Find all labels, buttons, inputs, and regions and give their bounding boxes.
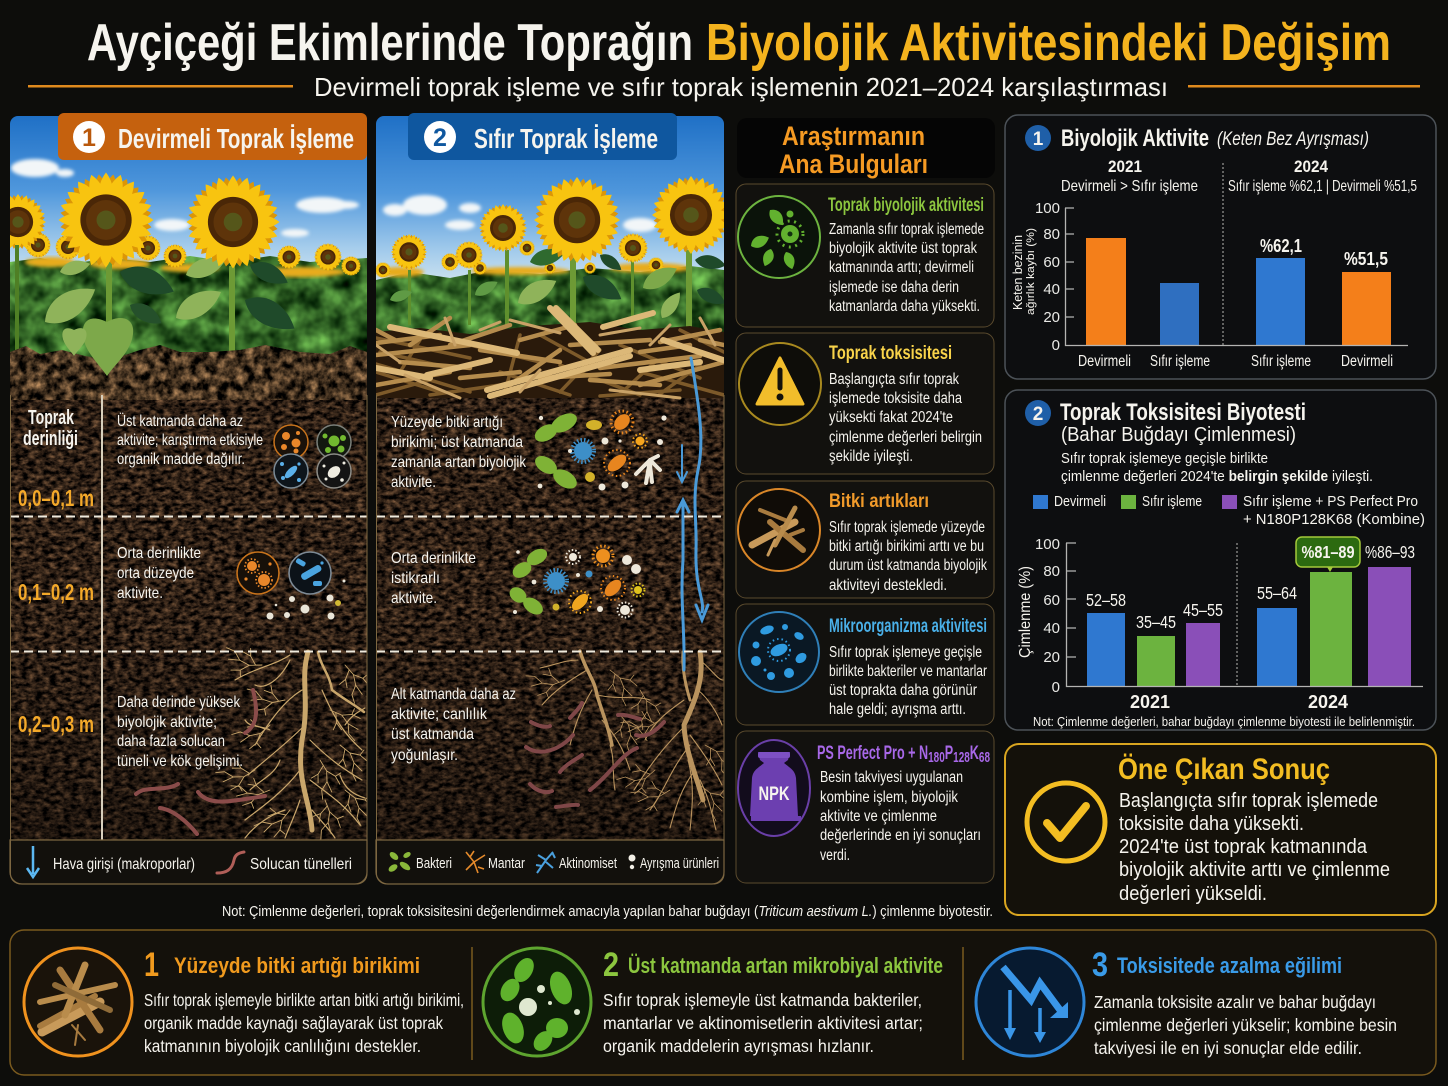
- bar chart: %62,1: [1260, 236, 1302, 256]
- card: PS Perfect Pro: 180: [928, 749, 945, 766]
- card: PS Perfect Pro: kombine işlem, biyolojik: [820, 789, 958, 806]
- card: soil toxicity: işlemede toksisite daha: [829, 390, 962, 407]
- legend: organisms: Aktinomiset: [559, 855, 618, 872]
- card: PS Perfect Pro: değerlerinde en iyi sonuçları: [820, 827, 981, 844]
- crop residue layer: [376, 308, 724, 398]
- card: microorganism activity: hale geldi; ayrışma arttı.: [829, 701, 966, 718]
- panel: key result: biyolojik aktivite arttı ve çimlenme: [1119, 859, 1390, 881]
- year captions: [1061, 157, 1417, 195]
- bar chart: Devirmeli: [1078, 353, 1131, 370]
- card: crop residues: durum üst katmanda biyolojik: [829, 557, 987, 574]
- title: [87, 14, 1391, 72]
- text: surface layer: birikimi; üst katmanda: [391, 434, 523, 451]
- panel: key result: 2024'te üst toprak katmanında: [1119, 836, 1368, 858]
- panel: key result: [1005, 744, 1436, 915]
- card: soil toxicity: [736, 333, 994, 474]
- text: deep layer: daha fazla solucan: [117, 733, 225, 750]
- icon: NPK bag: [738, 740, 810, 836]
- note: toxicity bioassay: Not: Çimlenme değerleri, toprak toksisitesini değerlendirmek amacıyla yapılan bahar buğdayı (Triticum aestivum L.) çimlenme biyotestir.: [222, 904, 993, 920]
- legend: conventional tillage: Solucan tünelleri: [250, 856, 352, 873]
- text: middle layer: istikrarlı: [391, 570, 440, 587]
- callout: best value: %81–89: [1302, 542, 1355, 562]
- card: soil biological activity: biyolojik aktivite üst toprak: [829, 240, 977, 257]
- icon: microbe and leaves: [738, 196, 820, 278]
- panel: key result: Başlangıçta sıfır toprak işlemede: [1119, 790, 1378, 812]
- bar chart: 0: [1052, 337, 1060, 354]
- bar chart: Devirmeli: [1341, 353, 1393, 370]
- card: PS Perfect Pro: 128: [953, 749, 970, 766]
- header: no-till: Sıfır Toprak İşleme: [474, 123, 658, 154]
- field scene: sunflowers: [0, 116, 367, 365]
- text: middle layer: Orta derinlikte: [391, 550, 476, 567]
- microbes: middle layer: [507, 545, 644, 618]
- chart summary: [1061, 451, 1373, 485]
- bar chart: 0: [1052, 679, 1060, 696]
- takeaway 1: Sıfır toprak işlemeyle birlikte artan bitki artığı birikimi,: [144, 990, 464, 1010]
- bar chart: Sıfır işleme: [1150, 353, 1210, 370]
- roots: [520, 651, 738, 830]
- text: deep layer: Alt katmanda daha az: [391, 686, 516, 703]
- legend: Sıfır işleme + PS Perfect Pro: [1243, 493, 1418, 510]
- panel: key result: Öne Çıkan Sonuç: [1118, 753, 1330, 786]
- bar chart: ağırlık kaybı (%): [1025, 228, 1037, 315]
- year captions: 2024: [1294, 157, 1328, 176]
- text: surface layer: [391, 414, 527, 491]
- icon: worm tunnel: [217, 852, 244, 873]
- chart summary: çimlenme değerleri 2024'te belirgin şekilde iyileşti.: [1061, 469, 1373, 485]
- depth labels: derinliği: [23, 428, 78, 450]
- icons: top layer microbes: [274, 425, 351, 488]
- legend: conventional tillage: Hava girişi (makroporlar): [53, 856, 195, 873]
- text: middle layer: aktivite.: [117, 585, 163, 602]
- card: soil biological activity: Toprak biyolojik aktivitesi: [828, 195, 984, 216]
- chart summary: Sıfır toprak işlemeye geçişle birlikte: [1061, 451, 1268, 467]
- icon: decomposition products: [628, 854, 636, 869]
- panel: biological activity chart: [1005, 115, 1436, 379]
- card: soil toxicity: Toprak toksisitesi: [829, 343, 952, 364]
- text: middle layer: [117, 545, 201, 602]
- icon: decreasing trend: [976, 948, 1084, 1056]
- bar chart: [1010, 163, 1408, 370]
- takeaway 2: Sıfır toprak işlemeyle üst katmanda bakteriler,: [603, 990, 922, 1010]
- icon: green bacteria: [483, 948, 591, 1056]
- takeaway 1: [24, 946, 464, 1056]
- takeaway 1: Yüzeyde bitki artığı birikimi: [174, 953, 420, 978]
- title: Ayçiçeği Ekimlerinde Toprağın: [87, 14, 693, 72]
- card: PS Perfect Pro: Besin takviyesi uygulanan: [820, 769, 963, 786]
- text: deep layer: Daha derinde yüksek: [117, 694, 241, 711]
- bar chart: Keten bezinin: [1010, 235, 1025, 310]
- legend: organisms: [376, 840, 724, 884]
- subtitle: Devirmeli toprak işleme ve sıfır toprak işlemenin 2021–2024 karşılaştırması: [314, 72, 1168, 102]
- panel: soil toxicity chart: [1005, 390, 1436, 730]
- bar chart: 2024: [1308, 692, 1348, 712]
- icon: warning triangle: [739, 343, 821, 425]
- card: microorganism activity: üst toprakta daha görünür: [829, 682, 977, 699]
- air arrows: [677, 358, 708, 670]
- bar chart: 2021: [1130, 692, 1170, 712]
- card: PS Perfect Pro: PS Perfect Pro + N: [817, 743, 984, 764]
- text: deep layer: tüneli ve kök gelişimi.: [117, 753, 243, 770]
- depth labels: 0,0–0,1 m: [18, 485, 94, 511]
- legend: Sıfır işleme: [1142, 493, 1202, 510]
- icon: crop residue: [24, 948, 132, 1056]
- chart heading: (Keten Bez Ayrışması): [1217, 129, 1369, 150]
- text: top layer: [117, 412, 263, 468]
- icon: bacteria: [387, 850, 412, 873]
- text: deep layer: yoğunlaşır.: [391, 747, 458, 764]
- header: conventional tillage: Devirmeli Toprak İşleme: [118, 123, 354, 154]
- text: middle layer: aktivite.: [391, 590, 437, 607]
- legend: conventional tillage: [10, 840, 367, 884]
- chart heading: 1: [1033, 129, 1044, 150]
- card: microorganism activity: Mikroorganizma aktivitesi: [829, 616, 987, 637]
- icon: actinomycete: [536, 852, 555, 873]
- year captions: Devirmeli > Sıfır işleme: [1061, 178, 1198, 195]
- card: soil biological activity: Zamanla sıfır toprak işlemede: [829, 221, 984, 238]
- text: deep layer: üst katmanda: [391, 726, 474, 743]
- takeaway 2: 2: [603, 946, 619, 984]
- card: PS Perfect Pro: aktivite ve çimlenme: [820, 808, 937, 825]
- heading: main findings: Araştırmanın: [782, 121, 925, 151]
- panel: no-till: [371, 113, 744, 884]
- takeaway 2: mantarlar ve aktinomisetlerin aktivitesi artar;: [603, 1013, 923, 1033]
- takeaway 3: 3: [1092, 946, 1108, 984]
- chart heading: 2: [1033, 404, 1043, 425]
- card: PS Perfect Pro: [736, 731, 994, 883]
- depth labels: Toprak: [28, 407, 75, 429]
- bar chart: 55–64: [1257, 583, 1297, 603]
- takeaway 1: katmanının biyolojik canlılığını destekler.: [144, 1036, 421, 1056]
- bar chart: [1017, 536, 1423, 712]
- text: surface layer: Yüzeyde bitki artığı: [391, 414, 503, 431]
- card: crop residues: Sıfır toprak işlemede yüzeyde: [829, 519, 985, 536]
- bar chart: 80: [1043, 563, 1060, 580]
- card: microorganism activity: [736, 604, 994, 725]
- depth labels: 0,1–0,2 m: [18, 579, 94, 605]
- depth guides: [376, 516, 724, 652]
- bar chart: 100: [1035, 200, 1060, 217]
- card: soil biological activity: katmanında arttı; devirmeli: [829, 259, 974, 276]
- legend: Devirmeli: [1054, 493, 1106, 510]
- icon: blue microbes: [739, 612, 819, 692]
- panel border: conventional: [10, 395, 367, 884]
- takeaway 2: [483, 946, 943, 1056]
- bar chart: 52–58: [1086, 590, 1126, 610]
- microbes: surface layer: [532, 409, 667, 493]
- depth labels: [18, 407, 94, 737]
- takeaway 3: takviyesi ile en iyi sonuçlar elde edilir.: [1094, 1038, 1362, 1058]
- card: crop residues: aktiviteyi destekledi.: [829, 577, 947, 594]
- earthworms: [526, 703, 664, 807]
- bar chart: 60: [1043, 592, 1060, 609]
- panel: conventional tillage: [0, 113, 372, 884]
- text: middle layer: Orta derinlikte: [117, 545, 201, 562]
- card: microorganism activity: Sıfır toprak işlemeye geçişle: [829, 644, 982, 661]
- roots: [215, 647, 366, 840]
- takeaway 3: [976, 946, 1397, 1058]
- callout: best value: [1296, 537, 1360, 572]
- card: PS Perfect Pro: P: [945, 743, 953, 764]
- panel: takeaways: [10, 930, 1436, 1075]
- chart heading: [1025, 399, 1306, 446]
- takeaway 2: Üst katmanda artan mikrobiyal aktivite: [628, 953, 943, 978]
- depth guides: [10, 395, 367, 840]
- field scene: sunflowers: [376, 116, 724, 334]
- bar chart: Sıfır işleme: [1251, 353, 1311, 370]
- bar chart: 20: [1043, 309, 1060, 326]
- text: deep layer: biyolojik aktivite;: [117, 714, 217, 731]
- bar chart: %51,5: [1344, 249, 1388, 269]
- card: PS Perfect Pro: K: [970, 743, 979, 764]
- legend: organisms: Ayrışma ürünleri: [640, 855, 719, 872]
- bar chart: 80: [1043, 226, 1060, 243]
- bar chart: Çimlenme (%): [1017, 566, 1034, 658]
- takeaway 2: organik maddelerin ayrışması hızlanır.: [603, 1036, 874, 1056]
- soil layers: [376, 385, 724, 845]
- card: microorganism activity: birlikte bakteriler ve mantarlar: [829, 663, 987, 680]
- bar chart: 100: [1035, 536, 1060, 553]
- soil layers: [10, 318, 367, 845]
- text: surface layer: aktivite.: [391, 474, 436, 491]
- legend: + N180P128K68 (Kombine): [1243, 511, 1425, 528]
- text: deep layer: aktivite; canlılık: [391, 706, 488, 723]
- card: crop residues: Bitki artıkları: [829, 491, 929, 512]
- card: soil toxicity: Başlangıçta sıfır toprak: [829, 371, 959, 388]
- takeaway 1: 1: [144, 946, 159, 984]
- depth labels: 0,2–0,3 m: [18, 711, 94, 737]
- card: soil toxicity: yüksekti fakat 2024'te: [829, 409, 953, 426]
- panel border: no-till: [376, 395, 724, 884]
- chart heading: (Bahar Buğdayı Çimlenmesi): [1061, 424, 1296, 446]
- header: no-till: [408, 113, 677, 160]
- card: soil toxicity: şekilde iyileşti.: [829, 448, 913, 465]
- chart heading: Biyolojik Aktivite: [1061, 125, 1209, 152]
- panel: key result: değerleri yükseldi.: [1119, 883, 1267, 905]
- header: conventional tillage: [58, 113, 367, 160]
- card: soil biological activity: [736, 184, 994, 327]
- icon: check mark: [1027, 783, 1105, 861]
- chart heading: Toprak Toksisitesi Biyotesti: [1060, 399, 1306, 426]
- takeaway 1: organik madde kaynağı sağlayarak üst toprak: [144, 1013, 443, 1033]
- text: deep layer: [391, 686, 516, 764]
- legend: organisms: Bakteri: [416, 855, 452, 872]
- heading: main findings: [737, 118, 995, 179]
- text: top layer: aktivite; karıştırma etkisiyle: [117, 432, 263, 449]
- icon: fungus: [466, 851, 485, 873]
- bar chart: 40: [1043, 620, 1060, 637]
- card: PS Perfect Pro: verdi.: [820, 847, 850, 864]
- bar chart: 35–45: [1136, 612, 1176, 632]
- text: top layer: organik madde dağılır.: [117, 451, 245, 468]
- header: no-till: 2: [433, 124, 447, 152]
- card: crop residues: [736, 481, 994, 598]
- card: PS Perfect Pro: 68: [979, 749, 990, 766]
- text: top layer: Üst katmanda daha az: [117, 412, 243, 430]
- text: deep layer: [117, 694, 243, 770]
- card: crop residues: bitki artığı birikimi arttı ve bu: [829, 538, 984, 555]
- bar chart: 40: [1043, 281, 1060, 298]
- chart heading: [1025, 125, 1369, 152]
- takeaway 3: Toksisitede azalma eğilimi: [1117, 953, 1342, 978]
- legend: [1033, 493, 1425, 528]
- text: middle layer: orta düzeyde: [117, 565, 194, 582]
- header: conventional tillage: 1: [82, 124, 96, 152]
- chart note: Not: Çimlenme değerleri, bahar buğdayı çimlenme biyotesti ile belirlenmiştir.: [1033, 715, 1415, 729]
- legend: organisms: Mantar: [488, 855, 525, 872]
- year captions: 2021: [1108, 157, 1142, 176]
- heading: main findings: Ana Bulguları: [779, 149, 928, 179]
- icon: straw sticks: [738, 489, 820, 571]
- takeaway 3: çimlenme değerleri yükselir; kombine besin: [1094, 1015, 1397, 1035]
- bar chart: 45–55: [1183, 600, 1223, 620]
- panel: key result: toksisite daha yüksekti.: [1119, 813, 1304, 835]
- bar chart: 60: [1043, 254, 1060, 271]
- earthworms: [136, 690, 265, 834]
- bar chart: 20: [1043, 649, 1060, 666]
- icon: air arrow: [27, 846, 39, 877]
- card: soil toxicity: çimlenme değerleri belirgin: [829, 429, 982, 446]
- icons: middle layer microbes: [237, 552, 346, 620]
- text: surface layer: zamanla artan biyolojik: [391, 454, 527, 471]
- icon: NPK bag: NPK: [758, 784, 790, 805]
- bar chart: %86–93: [1365, 542, 1415, 562]
- card: soil biological activity: işlemede ise daha derin: [829, 279, 959, 296]
- takeaway 3: Zamanla toksisite azalır ve bahar buğdayı: [1094, 992, 1376, 1012]
- text: middle layer: [391, 550, 476, 607]
- card: soil biological activity: katmanlarda daha yüksekti.: [829, 298, 980, 315]
